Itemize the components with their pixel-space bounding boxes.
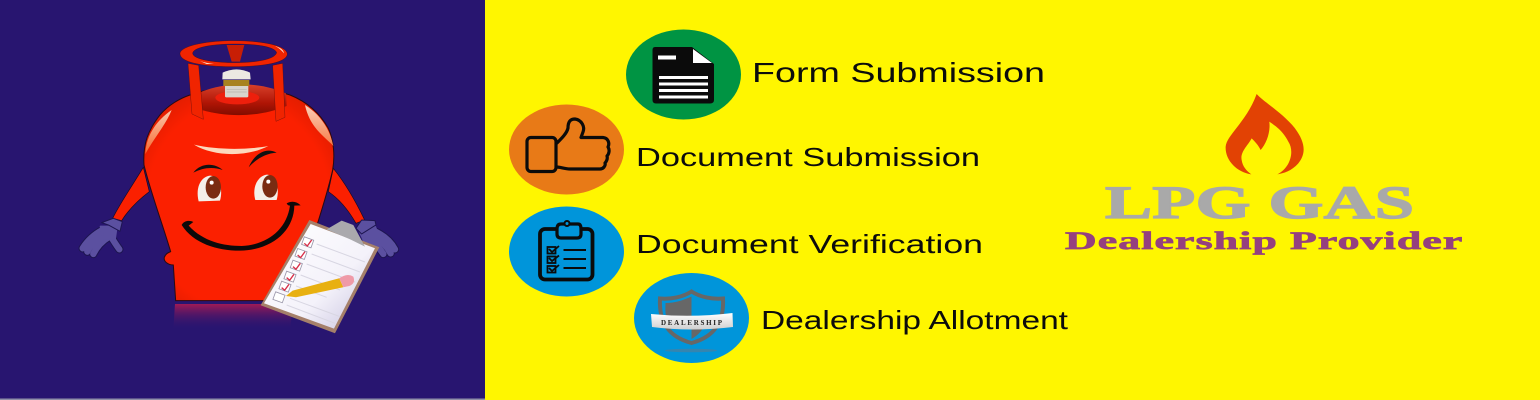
panel: yellow background [485,0,1540,400]
subtitle: Dealership Provider: Dealership Provider [1065,227,1462,255]
label: Form Submission [752,57,1045,88]
valve [222,69,251,97]
shoulder highlights [145,105,333,154]
left glove [83,218,122,254]
cylinder body [144,87,334,301]
right eye [254,175,278,200]
right arm [328,168,365,223]
title: LPG GAS: LPG GAS [1105,176,1414,228]
icon: document [652,47,714,104]
step: Form Submission [626,30,1045,120]
left strut [188,63,203,119]
ring highlights [200,46,284,64]
icon: clipboard checklist [540,221,592,280]
forehead highlight [194,145,268,154]
green circle [626,30,741,120]
blue circle [509,206,624,296]
pencil [286,278,343,297]
valve base [215,91,259,104]
illustration: gas cylinder mascot [83,41,395,333]
icon: thumbs up [527,119,609,172]
check marks [282,240,312,290]
collar ring [180,41,287,67]
label: Dealership Allotment [761,305,1069,335]
left eye [198,176,221,201]
clipboard clip [327,221,365,247]
back strut [227,45,244,62]
bottom edge strip [0,398,485,400]
icon: flame [1226,94,1304,174]
top dome [202,84,287,115]
right glove [356,220,395,254]
clipboard [261,220,379,333]
step: Dealership Allotment [634,273,1069,363]
right eyebrow [249,151,277,167]
checkboxes [273,237,314,303]
smile [182,202,301,251]
left eyebrow [193,165,223,173]
step: Document Submission [509,104,980,194]
label: Document Submission [636,142,980,172]
left arm [113,167,149,221]
step: Document Verification [509,206,983,296]
logo: LPG GAS Dealership Provider [1065,94,1462,255]
blue circle [634,273,749,363]
right strut [273,63,285,121]
icon: shield with banner [651,292,733,352]
label: Document Verification [636,229,983,259]
icon: shield with banner: DEALERSHIP [661,319,723,327]
orange circle [509,104,624,194]
checklist lines [287,244,365,323]
panel: navy mascot background [0,0,485,400]
cylinder reflection [173,304,293,330]
